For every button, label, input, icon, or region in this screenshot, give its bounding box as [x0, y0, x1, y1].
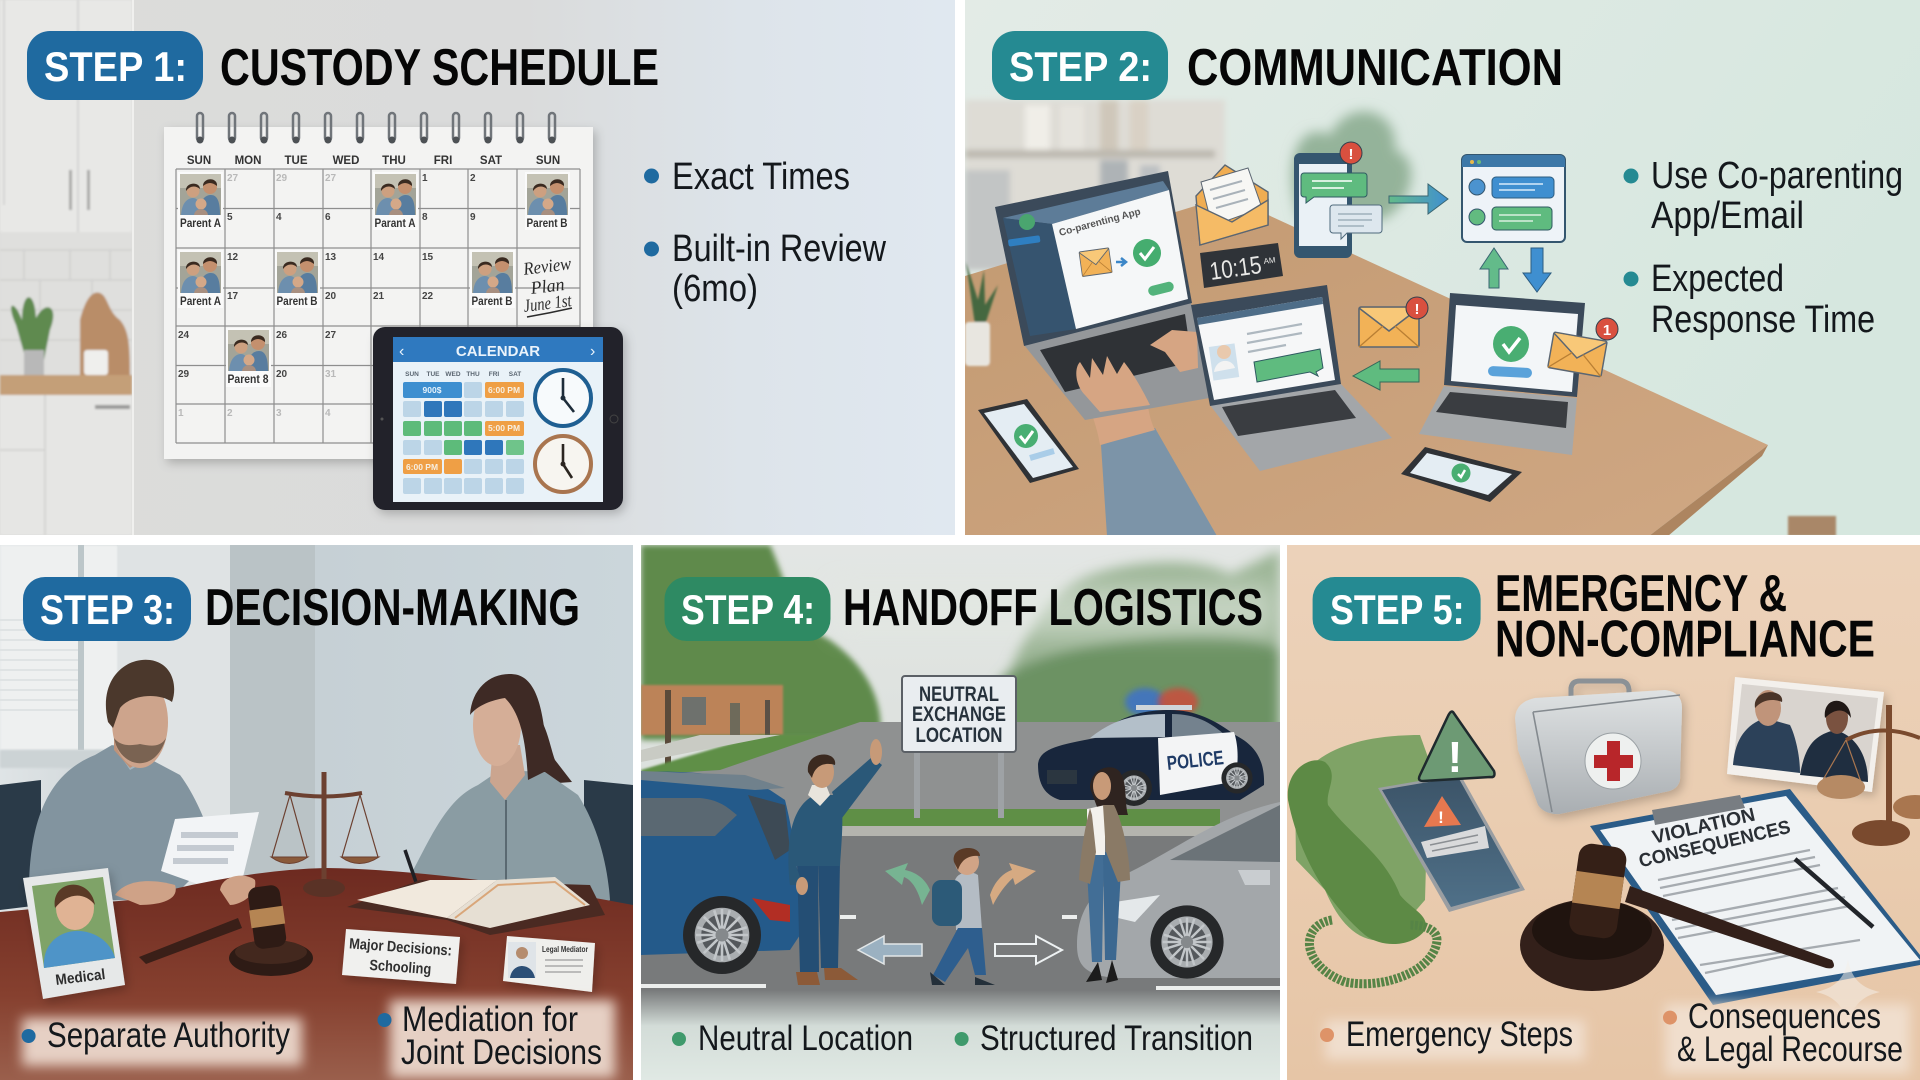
photo card: parent A week 1 — [178, 172, 223, 230]
sleeve and arm — [1094, 409, 1216, 535]
bullet list: step 3: Mediation for — [402, 1000, 578, 1039]
photo card: parent 8 — [226, 330, 271, 383]
wall calendar: SUN — [187, 155, 211, 167]
step 1 badge: STEP 1: — [44, 43, 187, 90]
wall calendar: 27 — [325, 330, 337, 341]
wall calendar: 29 — [276, 173, 288, 184]
neutral exchange location sign: NEUTRAL — [919, 683, 999, 706]
pen — [1795, 859, 1873, 927]
phone on table left — [978, 399, 1079, 483]
step 1 badge — [27, 31, 203, 100]
wall calendar: SUN — [536, 155, 560, 167]
legal mediator card — [503, 936, 595, 992]
police car — [1038, 688, 1264, 806]
wall calendar: TUE — [284, 155, 308, 167]
scales of justice — [271, 772, 379, 897]
chairs — [0, 780, 633, 910]
photo card: parant A: Parant A — [374, 218, 416, 230]
document held by man — [161, 812, 259, 892]
photo card: parent A week 2 — [178, 250, 223, 308]
bullet list: step 1 — [644, 156, 886, 310]
tablet calendar app: CALENDAR — [456, 343, 540, 360]
scales of justice — [1817, 705, 1920, 846]
arrow: right to mother — [995, 936, 1062, 964]
wall calendar: FRI — [434, 155, 452, 167]
blurred shelves and plant — [965, 100, 1225, 270]
first aid kit — [1515, 681, 1682, 814]
photo card: parent B week 2: Parent B — [276, 296, 318, 308]
phone on table bottom — [1401, 447, 1522, 502]
wall calendar: 2 — [227, 408, 233, 419]
arrow: left — [1353, 361, 1419, 390]
tablet calendar app: › — [590, 343, 595, 360]
wall calendar: 1 — [422, 173, 428, 184]
wood background — [1287, 545, 1920, 1080]
photo card: parent A week 2: Parent A — [180, 296, 221, 308]
wall calendar: 29 — [178, 369, 190, 380]
handwritten review note: June 1st — [522, 290, 573, 316]
panel: step 1 custody schedule — [0, 0, 955, 535]
right laptop with check — [1419, 293, 1585, 455]
curved arrow: to mother — [990, 863, 1036, 905]
handwritten review note — [524, 260, 572, 318]
icon: envelope alert — [1359, 297, 1428, 347]
smartphone with warning: ! — [1438, 808, 1444, 827]
neutral exchange location sign — [902, 676, 1016, 818]
bullet list: step 3: Separate Authority — [47, 1016, 290, 1055]
photo card: parent B week 2 — [275, 250, 320, 308]
icon: envelope alert: ! — [1414, 301, 1420, 318]
man reading document — [29, 660, 216, 900]
step 5 badge: STEP 5: — [1330, 586, 1464, 633]
tablet calendar app: TUE — [426, 371, 440, 378]
bullet list: step 1: (6mo) — [672, 268, 758, 310]
wall calendar: 20 — [276, 369, 288, 380]
legal mediator card: Legal Mediator — [542, 945, 588, 954]
step 5 badge — [1313, 577, 1481, 641]
bullet list: step 1: Exact Times — [672, 156, 850, 198]
police car: POLICE — [1166, 747, 1225, 775]
wall calendar: THU — [382, 155, 406, 167]
wall background — [0, 0, 955, 535]
bullet list: step 2: Response Time — [1651, 299, 1875, 341]
arrow: down — [1523, 248, 1551, 292]
wall calendar: 1 — [178, 408, 184, 419]
bullet list: step 2 — [1624, 155, 1903, 341]
wall calendar: WED — [333, 155, 359, 167]
panel: step 5 emergency and non-compliance — [1287, 545, 1920, 1080]
potted plant — [965, 262, 998, 366]
digital clock: 10:15 — [1208, 251, 1263, 286]
bullet text glow — [22, 1000, 615, 1078]
wall calendar — [164, 113, 593, 459]
middle laptop with message — [1191, 285, 1392, 471]
wall calendar: 4 — [325, 408, 331, 419]
tablet calendar app: ‹ — [399, 343, 404, 360]
handwritten review note: Review — [521, 253, 572, 279]
panel: step 3 decision-making — [0, 545, 633, 1080]
violation consequences clipboard: CONSEQUENCES — [1637, 817, 1793, 872]
step 2 badge: STEP 2: — [1009, 43, 1152, 90]
photo card: parent 8: Parent 8 — [228, 374, 269, 386]
mother standing — [1079, 767, 1130, 983]
tablet schedule grid: 900$ — [423, 385, 442, 395]
parking lot and road — [641, 722, 1280, 1080]
wall calendar: SAT — [480, 155, 502, 167]
step 1 title: CUSTODY SCHEDULE — [220, 39, 659, 97]
bullet list: step 3: Joint Decisions — [401, 1033, 602, 1072]
browser chat window — [1462, 155, 1565, 242]
panel: step 2 communication — [965, 0, 1920, 536]
wall calendar: 27 — [325, 173, 337, 184]
wall calendar: 13 — [325, 252, 337, 263]
violation consequences clipboard — [1590, 789, 1920, 1005]
icon: envelope alert on laptop: 1 — [1603, 322, 1611, 339]
wall calendar: 17 — [227, 291, 239, 302]
wall calendar: 20 — [325, 291, 337, 302]
step 3 badge — [23, 577, 191, 641]
photo card: parent B week 1: Parent B — [526, 218, 568, 230]
photo card: parent B green — [470, 250, 515, 308]
wooden table — [965, 203, 1836, 536]
alert triangle icon: ! — [1448, 733, 1462, 782]
tablet schedule grid: 5:00 PM — [488, 423, 520, 433]
step 4 title: HANDOFF LOGISTICS — [843, 579, 1263, 637]
bullet list: step 4: Neutral Location — [698, 1019, 913, 1058]
icon: open envelope with letter — [1196, 165, 1268, 245]
blurred park trees and building — [641, 545, 1280, 795]
step 4 badge — [664, 577, 830, 641]
arrow: left to father — [858, 936, 922, 964]
mint wall background — [965, 0, 1920, 535]
bullet list: step 2: App/Email — [1651, 195, 1804, 237]
tablet schedule grid: 6:00 PM — [406, 462, 438, 472]
green desk telephone — [1288, 735, 1437, 984]
office wall and window — [0, 545, 633, 1080]
wall calendar: 22 — [422, 291, 434, 302]
step 5 title: EMERGENCY & — [1495, 565, 1787, 623]
hands — [115, 876, 430, 915]
neutral exchange location sign: LOCATION — [916, 724, 1002, 747]
bullet list: step 5: Consequences — [1688, 997, 1881, 1036]
tablet calendar app: FRI — [489, 371, 499, 378]
phone with chat bubbles — [1294, 142, 1382, 258]
curved arrow: to father — [885, 863, 930, 905]
child photo frame labelled Medical — [23, 868, 125, 999]
phone with chat bubbles: ! — [1348, 146, 1354, 163]
icon: blue clock — [535, 370, 591, 426]
icon: envelope alert on laptop — [1548, 318, 1618, 377]
digital clock — [1200, 243, 1283, 288]
bottom fade — [641, 990, 1280, 1080]
photo of lawyers — [1727, 677, 1884, 792]
wall calendar: 31 — [325, 369, 337, 380]
wall calendar: 27 — [227, 173, 239, 184]
icon: brown clock — [535, 436, 591, 492]
step 2 title: COMMUNICATION — [1187, 39, 1563, 97]
bullet list: step 5: Emergency Steps — [1346, 1015, 1573, 1054]
wall calendar: 15 — [422, 252, 434, 263]
large laptop with co-parenting app: Co-parenting App — [1058, 207, 1142, 239]
wall calendar: 4 — [276, 212, 282, 223]
wall calendar: 6 — [325, 212, 331, 223]
tablet schedule grid: 6:00 PM — [488, 385, 520, 395]
bullet list: step 4: Structured Transition — [980, 1019, 1253, 1058]
title haze — [835, 585, 1275, 635]
photo card: parant A — [373, 172, 418, 230]
photo card: parent A week 1: Parent A — [180, 218, 221, 230]
wall calendar: 2 — [470, 173, 476, 184]
large laptop with co-parenting app — [995, 171, 1215, 420]
tablet calendar app — [373, 327, 623, 510]
watermark sparkle — [1816, 960, 1880, 1025]
hands on keyboard — [1076, 330, 1198, 412]
father waving — [788, 739, 882, 985]
step 5 title — [1495, 565, 1875, 668]
step 4 badge: STEP 4: — [681, 586, 815, 633]
mahogany table — [0, 868, 633, 1080]
sky — [641, 545, 1280, 1080]
wall calendar: 8 — [422, 212, 428, 223]
handwritten review note: Plan — [528, 274, 566, 298]
tablet calendar app: SUN — [405, 371, 419, 378]
step 3 badge: STEP 3: — [40, 586, 175, 633]
tablet calendar app: SAT — [509, 371, 521, 378]
open book — [347, 877, 605, 935]
digital clock: AM — [1263, 255, 1276, 266]
grey car — [1077, 802, 1280, 979]
bullet list: step 1: Built-in Review — [672, 228, 886, 270]
blurred kitchen scene — [0, 0, 132, 535]
wall calendar: 24 — [178, 330, 190, 341]
bullet list: step 4 — [672, 1019, 1253, 1058]
wall calendar: 12 — [227, 252, 239, 263]
wall calendar: MON — [235, 155, 261, 167]
bullet text glow — [1325, 1004, 1910, 1074]
neutral exchange location sign: EXCHANGE — [912, 703, 1006, 726]
arrow: phone to browser — [1389, 184, 1448, 214]
child with backpack — [930, 848, 995, 985]
pen — [405, 850, 418, 888]
wall calendar: 3 — [276, 408, 282, 419]
gavel — [139, 884, 313, 976]
step 2 badge — [992, 31, 1168, 100]
wall calendar: 9 — [470, 212, 476, 223]
wall calendar: 5 — [227, 212, 233, 223]
placard: major decisions schooling: Major Decisions: — [349, 935, 452, 960]
child photo frame labelled Medical: Medical — [55, 966, 106, 989]
blue suv — [641, 771, 800, 974]
placard: major decisions schooling: Schooling — [369, 957, 432, 978]
wall calendar: 14 — [373, 252, 385, 263]
woman writing — [408, 674, 610, 930]
step 3 title: DECISION-MAKING — [205, 579, 580, 637]
tablet schedule grid — [403, 382, 524, 494]
alert triangle icon — [1419, 712, 1494, 782]
tablet calendar app: THU — [466, 371, 480, 378]
wall calendar: 21 — [373, 291, 385, 302]
violation consequences clipboard: VIOLATION — [1650, 805, 1757, 849]
tablet calendar app: WED — [445, 371, 461, 378]
bullet list: step 2: Expected — [1651, 258, 1784, 300]
bullet list: step 5 — [1320, 997, 1903, 1069]
arrow: up — [1480, 248, 1508, 288]
gavel on block — [1520, 842, 1834, 991]
panel: step 4 handoff logistics — [641, 545, 1280, 1080]
smartphone with warning — [1378, 774, 1525, 912]
photo card: parent B week 1 — [525, 172, 570, 230]
placard: major decisions schooling — [342, 929, 460, 984]
photo card: parent B green: Parent B — [472, 296, 512, 308]
wall calendar: 26 — [276, 330, 288, 341]
bullet list: step 3 — [22, 1000, 602, 1072]
